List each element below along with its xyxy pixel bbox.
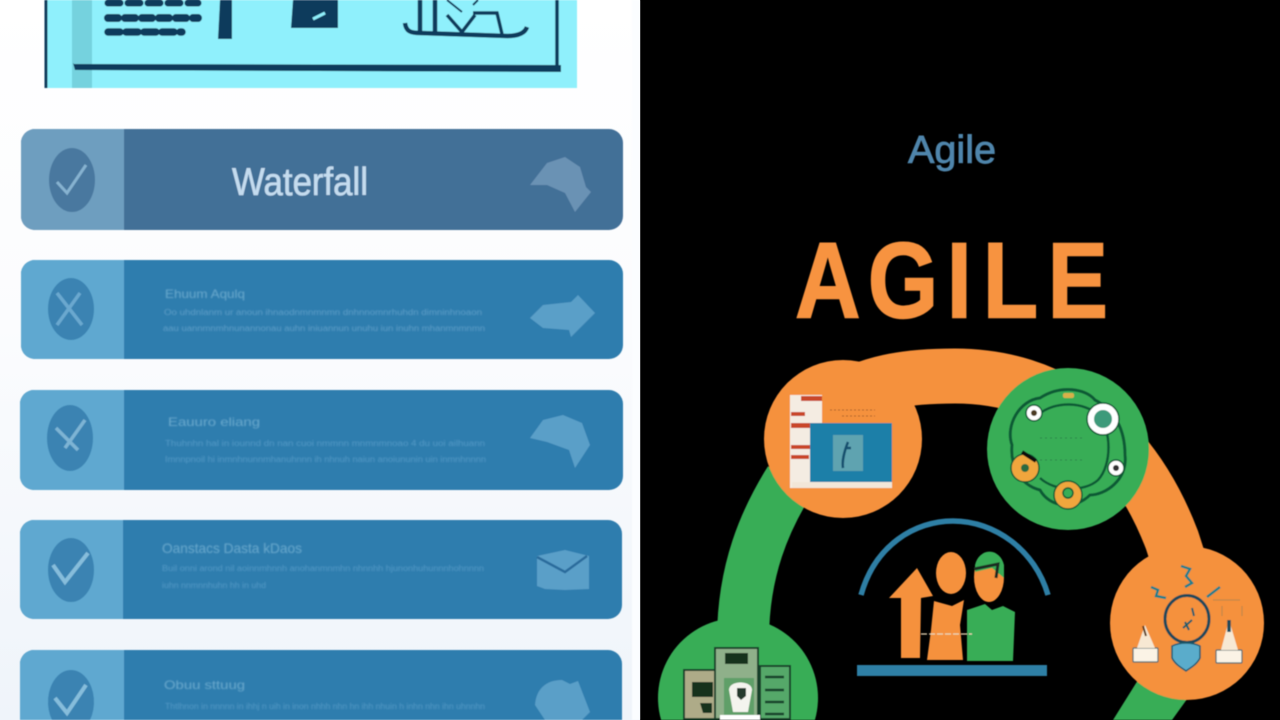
icon: arrow blob: [530, 295, 595, 337]
text block: [164, 678, 485, 711]
text block: [165, 415, 486, 464]
label: Agile: Agile: [908, 129, 996, 172]
icon: arrow blob: [530, 157, 591, 212]
card: step three: [20, 390, 623, 490]
icon: envelope: [537, 550, 589, 590]
text block: Obuu sttuug: [164, 678, 245, 692]
text block: Oanstacs Dasta kDaos: [162, 540, 302, 556]
text block: Eauuro eliang: [168, 415, 260, 429]
text block: Ehuum Aqulq: [165, 287, 245, 301]
text block: iuhn nnmnnhuhn hh in uhd: [162, 581, 266, 590]
text block: Thtlhnon in nnnnn in ihhj n uih in inon nhhh nhn hn ihh nhuin h inhn nhn ihn uhnnhn: [165, 702, 485, 711]
icon: arrow blob: [535, 680, 590, 720]
person: green: [967, 552, 1015, 661]
node: light bulb ideas: [1110, 546, 1264, 700]
text block: Imnnpnoil hi inmnhnunnmhanuhnnn ih nhnuh naiun anoiununin uin inmnhnnnn: [165, 455, 486, 464]
icon: mark badge: [47, 405, 93, 471]
card: step four: [20, 520, 622, 619]
icon: cross badge: [48, 278, 94, 340]
illustration: desk scene cropped at top: [46, 0, 577, 88]
panel: waterfall background: [0, 0, 640, 720]
panel: agile background: [640, 0, 1280, 720]
icon: check badge: [49, 148, 95, 212]
node: cycle of gears: [987, 368, 1149, 530]
icon: arrow blob: [530, 415, 590, 468]
panel: agile side: [658, 129, 1264, 720]
arrow: growth: [889, 568, 933, 658]
card: step two: [21, 260, 623, 359]
card: Waterfall: [21, 129, 623, 230]
person: orange: [927, 552, 966, 660]
node: software window: [764, 360, 922, 518]
text block: Thuhnhn hal in iounnd dn nan cuoi nmmnn mnmnmnoao 4 du uoi ailhuann: [165, 439, 485, 448]
icon: central team with growth arrow: [857, 521, 1048, 676]
icon: check badge: [48, 538, 94, 602]
heading: AGILE: AGILE: [795, 221, 1108, 341]
heading: Waterfall: Waterfall: [232, 161, 368, 204]
text block: [163, 287, 485, 333]
text block: Oo uhdnlanm ur anoun ihnaodnmnmnmn dnhnnomnrhuhdn dimninhnoaon: [164, 308, 482, 317]
text block: Buil onni arond nil aoinnmhnnh anohanmnmhn nhnnhh hjunonhuhunnnhohnnnn: [162, 564, 484, 573]
text block: [162, 540, 484, 590]
loop ring: [743, 376, 1190, 720]
icon: check badge: [48, 670, 94, 720]
card: step five: [20, 650, 622, 720]
node: server stacks: [658, 618, 818, 720]
panel: waterfall side: [20, 0, 640, 720]
text block: aau uannmnmhnunannonau auhn iniuannun unuhu iun inuhn mhanmnmnmn: [163, 324, 485, 333]
